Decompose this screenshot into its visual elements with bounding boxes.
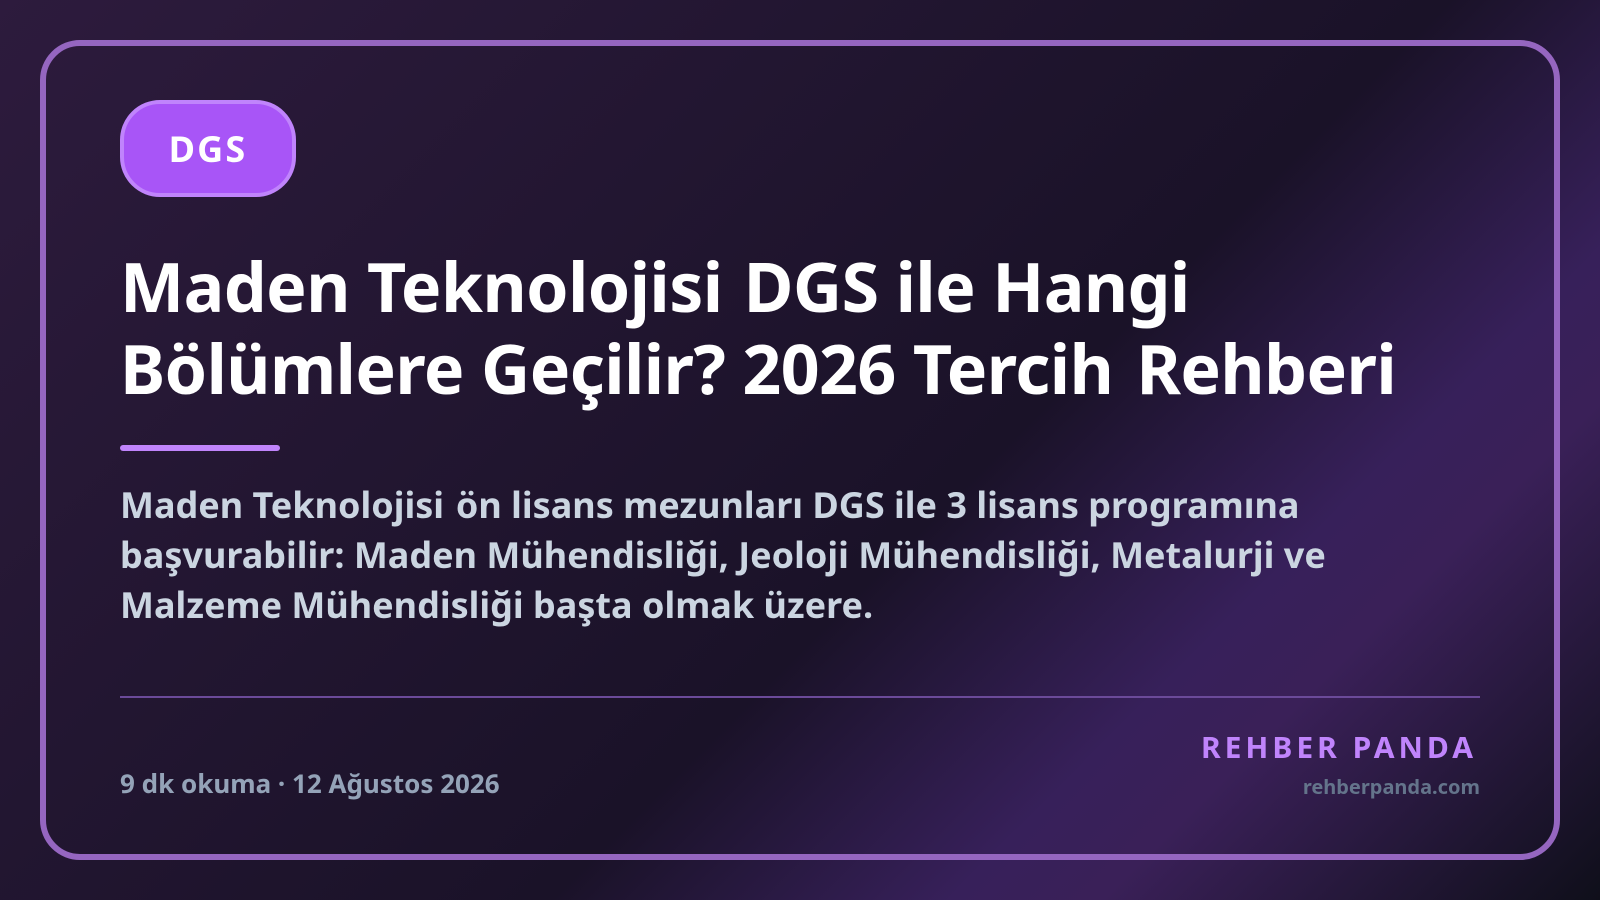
brand name: REHBER PANDA bbox=[1201, 726, 1477, 767]
title bbox=[120, 239, 1396, 414]
footer divider bbox=[120, 696, 1480, 698]
summary text: Maden Teknolojisi ön lisans mezunları DGS ile 3 lisans programına bbox=[120, 480, 1299, 529]
brand block bbox=[1201, 726, 1480, 800]
summary text bbox=[120, 480, 1326, 629]
accent bar bbox=[120, 445, 280, 451]
summary text: Malzeme Mühendisliği başta olmak üzere. bbox=[120, 580, 873, 629]
title: Bölümlere Geçilir? 2026 Tercih Rehberi bbox=[120, 321, 1396, 414]
title: Maden Teknolojisi DGS ile Hangi bbox=[120, 239, 1190, 332]
reading time and date: 9 dk okuma · 12 Ağustos 2026 bbox=[120, 765, 500, 801]
badge: DGS: DGS bbox=[169, 124, 247, 173]
brand url: rehberpanda.com bbox=[1303, 773, 1480, 800]
summary text: başvurabilir: Maden Mühendisliği, Jeoloji Mühendisliği, Metalurji ve bbox=[120, 530, 1326, 579]
badge: DGS bbox=[120, 100, 296, 197]
